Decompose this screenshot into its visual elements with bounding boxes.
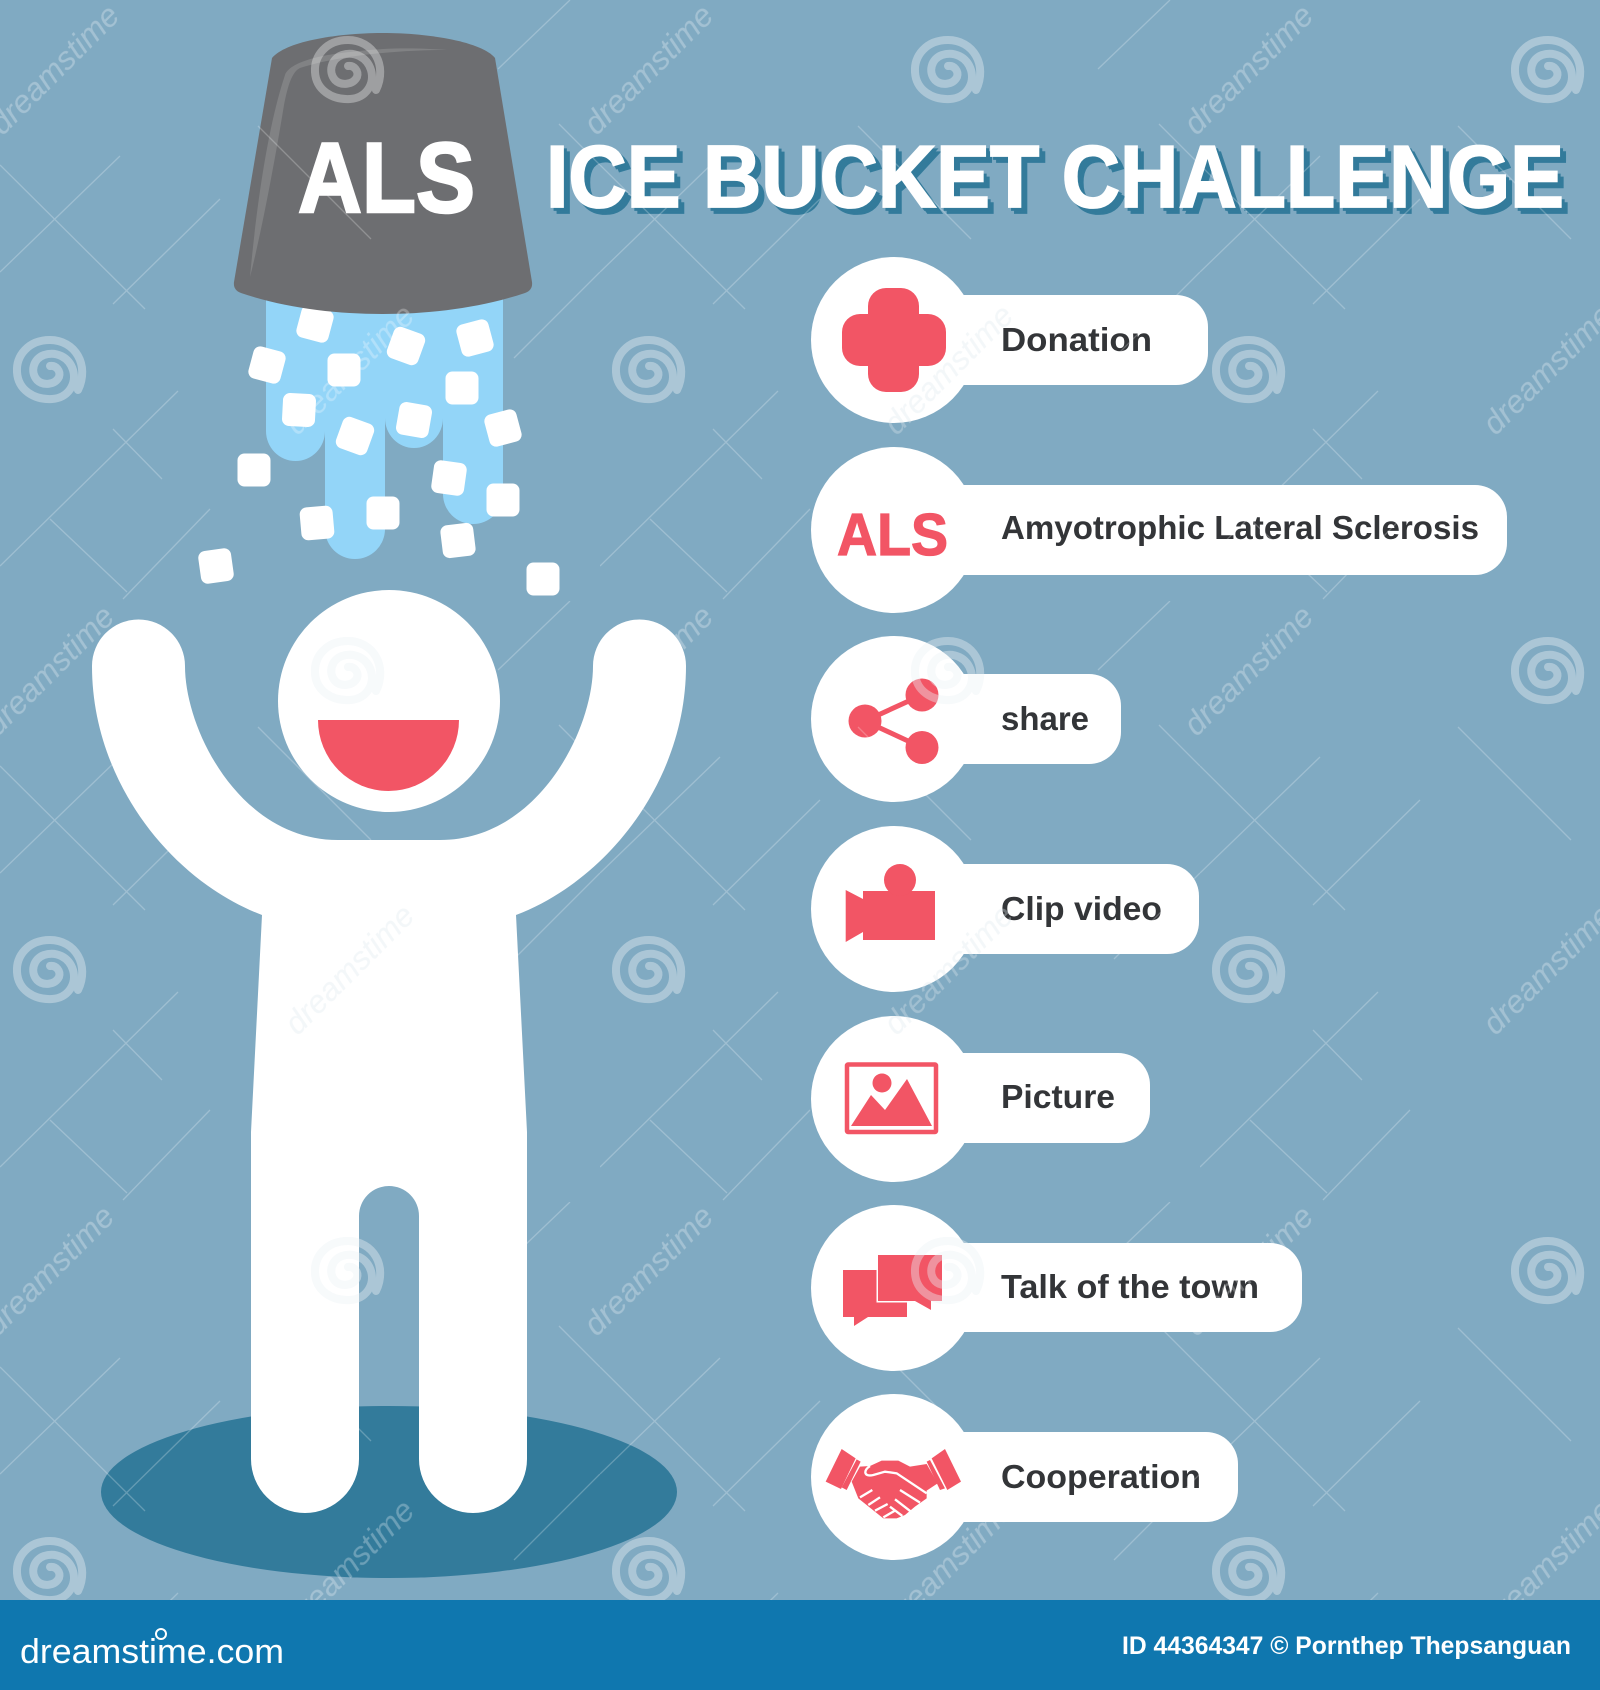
watermark text: dreamstime bbox=[876, 1492, 1020, 1636]
water pouring from bucket bbox=[266, 280, 503, 559]
watermark text: dreamstime bbox=[277, 1492, 421, 1636]
footer logo mark bbox=[156, 1629, 166, 1639]
watermark text: dreamstime bbox=[1176, 0, 1320, 141]
puddle bbox=[101, 1406, 677, 1578]
watermark text on white shapes bbox=[277, 297, 1020, 1041]
icon: medical cross bbox=[842, 288, 946, 392]
watermark text on white shapes: dreamstime bbox=[876, 297, 1020, 441]
item: Picture bbox=[811, 1016, 1150, 1182]
icon: speech bubbles bbox=[843, 1255, 942, 1326]
label: Talk of the town: Talk of the town bbox=[1001, 1268, 1259, 1305]
watermark text: dreamstime bbox=[576, 0, 720, 141]
icon: video camera bbox=[846, 864, 935, 942]
footer credit: ID 44364347 © Pornthep Thepsanguan bbox=[1122, 1632, 1571, 1660]
icon: picture bbox=[847, 1064, 936, 1132]
bucket bbox=[234, 33, 532, 314]
item: Cooperation bbox=[811, 1394, 1238, 1560]
label: Amyotrophic Lateral Sclerosis: Amyotrophic Lateral Sclerosis bbox=[1001, 509, 1479, 546]
label: share: share bbox=[1001, 700, 1089, 737]
watermark text on white shapes: dreamstime bbox=[876, 897, 1020, 1041]
ice cubes bbox=[197, 304, 560, 596]
label: Clip video: Clip video bbox=[1001, 890, 1162, 927]
watermark text on white shapes: dreamstime bbox=[277, 897, 421, 1041]
item: Clip video bbox=[811, 826, 1199, 992]
head bbox=[278, 590, 500, 812]
smiling mouth bbox=[318, 720, 459, 791]
watermark spirals on white shapes bbox=[315, 641, 980, 1300]
label: Picture: Picture bbox=[1001, 1078, 1115, 1115]
item: ALS bbox=[811, 447, 1507, 613]
label: Cooperation: Cooperation bbox=[1001, 1458, 1201, 1495]
watermark text: dreamstime bbox=[576, 598, 720, 742]
watermark text: dreamstime bbox=[876, 897, 1020, 1041]
label: Donation: Donation bbox=[1001, 321, 1152, 358]
bucket highlight bbox=[250, 48, 447, 277]
item: Donation bbox=[811, 257, 1208, 423]
watermark text: dreamstime bbox=[1176, 598, 1320, 742]
watermark text: dreamstime bbox=[277, 897, 421, 1041]
person figure bbox=[92, 590, 686, 1513]
bucket label: ALS bbox=[298, 122, 475, 233]
item: Talk of the town bbox=[811, 1205, 1302, 1371]
item: share bbox=[811, 636, 1121, 802]
watermark text: dreamstime bbox=[277, 297, 421, 441]
icon: share bbox=[848, 678, 938, 764]
watermark text: dreamstime bbox=[1176, 1198, 1320, 1342]
icon: handshake bbox=[826, 1449, 961, 1518]
footer logo text: dreamstime.com bbox=[20, 1633, 284, 1671]
footer bar bbox=[0, 1600, 1600, 1690]
watermark text: dreamstime bbox=[576, 1198, 720, 1342]
watermark text: dreamstime bbox=[876, 297, 1020, 441]
icon: ALS letters: ALS bbox=[837, 502, 948, 568]
